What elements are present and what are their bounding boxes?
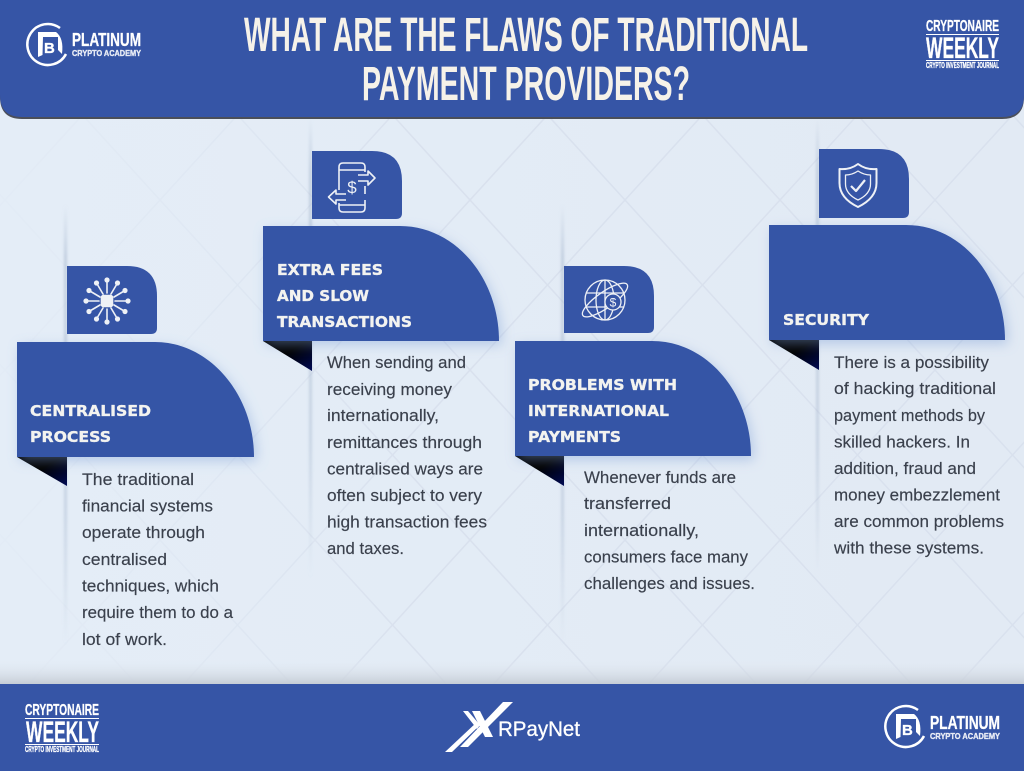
heading 2: EXTRA FEES: [277, 261, 383, 279]
text 3: Whenever funds are: [584, 469, 736, 487]
panel: extra fees: [263, 151, 499, 558]
heading block 1: [17, 342, 254, 457]
logo: XRPayNet: [445, 702, 580, 752]
title: PAYMENT PROVIDERS?: [362, 58, 690, 111]
logo: Platinum Crypto Academy (header): [27, 24, 141, 65]
text 2: often subject to very: [327, 487, 483, 505]
text 2: remittances through: [327, 434, 482, 452]
text 1: [82, 471, 234, 649]
text 2: internationally,: [327, 407, 439, 425]
text 1: financial systems: [82, 498, 213, 516]
logo: Platinum Crypto Academy (header): CRYPTO ACADEMY: [72, 48, 141, 58]
logo: Platinum Crypto Academy (footer): B: [902, 722, 913, 739]
text 4: money embezzlement: [834, 486, 1000, 504]
text 2: [327, 354, 487, 558]
logo: Platinum Crypto Academy (footer): [885, 706, 1000, 747]
heading 2: AND SLOW: [277, 287, 369, 305]
text 4: payment methods by: [834, 407, 986, 425]
text 4: with these systems.: [833, 540, 984, 558]
fold 4: [769, 340, 819, 370]
logo: Cryptonaire Weekly (footer): [25, 702, 99, 754]
text 2: and taxes.: [327, 540, 404, 558]
icon: globe: [578, 278, 632, 322]
fold 1: [17, 457, 67, 486]
text 3: internationally,: [584, 522, 699, 540]
logo: Cryptonaire Weekly (header): [926, 18, 999, 70]
heading 1: PROCESS: [30, 428, 111, 446]
heading 1: [30, 402, 151, 446]
logo: Cryptonaire Weekly (footer): WEEKLY: [26, 716, 99, 749]
logo: Platinum Crypto Academy (footer): PLATINUM: [930, 713, 1000, 733]
text 4: addition, fraud and: [834, 460, 976, 478]
header banner: [0, 0, 1024, 119]
footer band: [0, 684, 1024, 771]
tab 4: [819, 149, 909, 218]
panel: centralised process: [17, 266, 254, 649]
heading 3: PROBLEMS WITH: [528, 376, 677, 394]
heading 4: SECURITY: [783, 311, 870, 329]
text 4: skilled hackers. In: [834, 434, 970, 452]
text 2: receiving money: [327, 381, 453, 399]
text 1: The traditional: [82, 471, 194, 489]
text 3: transferred: [584, 495, 671, 513]
fold 2: [263, 341, 312, 371]
icon: phone with arrows: [328, 163, 375, 212]
text 3: challenges and issues.: [584, 575, 755, 593]
logo: Cryptonaire Weekly (footer): CRYPTO INVESTMENT JOURNAL: [25, 745, 99, 754]
heading block 3: [515, 341, 751, 456]
tab 2: [312, 151, 402, 219]
icon: network: [84, 278, 130, 324]
heading 1: CENTRALISED: [30, 402, 151, 420]
text 3: [584, 469, 755, 593]
text 4: of hacking traditional: [834, 380, 996, 398]
text 4: There is a possibility: [834, 354, 990, 372]
icon: globe: $: [610, 296, 617, 310]
text 1: centralised: [82, 551, 167, 569]
text 2: When sending and: [327, 354, 466, 372]
text 4: [833, 354, 1004, 558]
heading block 4: [769, 225, 1005, 340]
fold 3: [515, 456, 564, 486]
text 1: operate through: [82, 524, 205, 542]
text 3: consumers face many: [584, 548, 749, 566]
logo: XRPayNet: RPayNet: [498, 718, 580, 741]
heading block 2: [263, 226, 499, 341]
icon: phone with arrows: $: [347, 178, 357, 197]
text 2: centralised ways are: [327, 460, 483, 478]
logo: Platinum Crypto Academy (footer): CRYPTO ACADEMY: [930, 731, 1000, 741]
icon: shield: [840, 164, 876, 207]
logo: Platinum Crypto Academy (header): B: [44, 40, 55, 57]
text 2: high transaction fees: [327, 514, 487, 532]
heading 3: INTERNATIONAL: [528, 402, 669, 420]
logo: Cryptonaire Weekly (footer): CRYPTONAIRE: [25, 702, 99, 719]
tab 1: [67, 266, 157, 334]
column shadows: [64, 118, 819, 645]
panel: security: [769, 149, 1005, 558]
text 4: are common problems: [834, 513, 1004, 531]
heading 3: PAYMENTS: [528, 428, 621, 446]
panel: international payments: [515, 266, 755, 593]
heading 2: TRANSACTIONS: [277, 313, 412, 331]
logo: Platinum Crypto Academy (header): PLATINUM: [72, 30, 141, 50]
tab 3: [564, 266, 654, 333]
title: [244, 9, 808, 111]
text 1: techniques, which: [82, 578, 219, 596]
heading 3: [528, 376, 677, 446]
text 1: require them to do a: [82, 604, 234, 622]
heading 2: [277, 261, 412, 331]
text 1: lot of work.: [82, 631, 167, 649]
